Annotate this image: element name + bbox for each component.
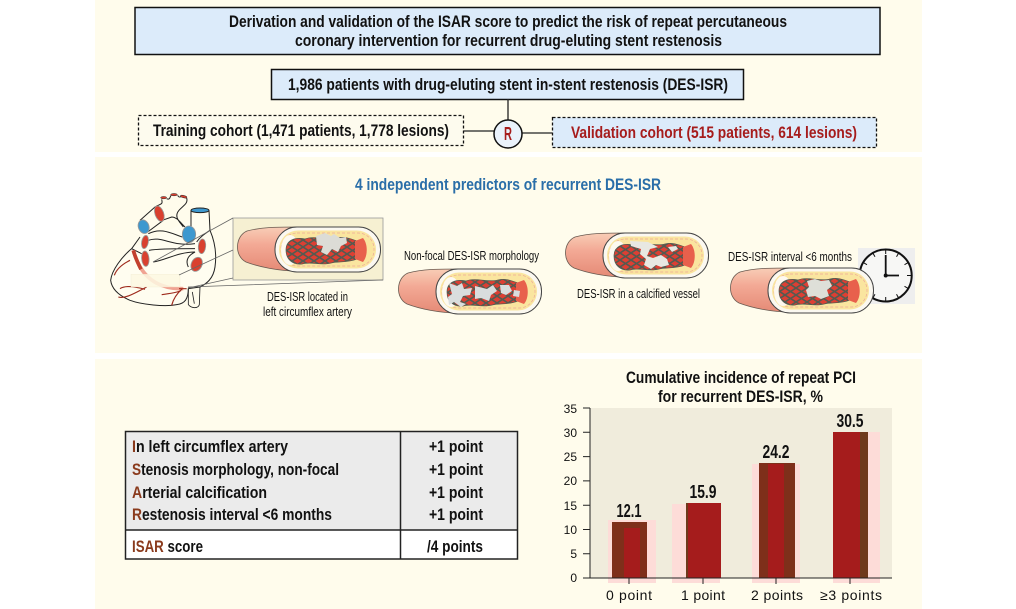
vessel: non-focal [398, 269, 542, 314]
ISAR score table: ISAR score [132, 537, 203, 556]
ISAR score table: +1 point [429, 437, 483, 456]
axes: 35 [564, 402, 577, 416]
zoom guide lines [153, 218, 383, 288]
bar: 3 points or more [833, 411, 880, 583]
axes [564, 402, 892, 603]
title box: coronary intervention for recurrent drug-eluting stent restenosis [295, 31, 722, 50]
bar chart [564, 402, 892, 603]
axes: 1 point [681, 587, 725, 603]
vessel: interval [730, 268, 874, 313]
chart title: for recurrent DES-ISR, % [658, 387, 823, 406]
chart title [626, 368, 856, 406]
axes: 0 point [606, 587, 652, 603]
ISAR score table: In left circumflex artery [132, 437, 288, 456]
bar: 1 point: 15.9 [690, 482, 716, 502]
axes: 0 [570, 571, 577, 585]
zoom box: circumflex vessel [233, 218, 383, 280]
panel: ISAR score and outcomes [95, 359, 922, 609]
randomisation connector: R [504, 124, 512, 144]
predictors heading: 4 independent predictors of recurrent DES-ISR [355, 175, 661, 194]
icon: clock [858, 248, 915, 304]
validation cohort box [552, 118, 876, 148]
axes: 2 points [751, 587, 803, 603]
bar: 1 point [672, 482, 721, 583]
ISAR score table [126, 432, 518, 559]
bar: 0 point: 12.1 [616, 501, 642, 521]
ISAR score table: /4 points [427, 537, 483, 556]
validation cohort box: Validation cohort (515 patients, 614 lesions) [571, 123, 857, 142]
label: circumflex: left circumflex artery [263, 304, 352, 319]
chart title: Cumulative incidence of repeat PCI [626, 368, 856, 387]
ISAR score table: +1 point [429, 483, 483, 502]
ISAR score table: Restenosis interval <6 months [132, 505, 332, 524]
axes: 10 [564, 523, 577, 537]
vessel: calcified [565, 233, 708, 278]
axes: 30 [564, 426, 577, 440]
bar: 2 points: 24.2 [762, 442, 790, 462]
patient population box [272, 70, 744, 100]
bar: 0 point [608, 501, 656, 583]
vessel: circumflex plaque [316, 233, 347, 255]
label: interval: DES-ISR interval <6 months [728, 249, 852, 264]
label: circumflex [263, 289, 352, 319]
axes: 5 [570, 547, 577, 561]
training cohort box: Training cohort (1,471 patients, 1,778 lesions) [153, 121, 449, 140]
panel: predictors [95, 157, 922, 353]
label: circumflex: DES-ISR located in [267, 289, 348, 304]
label: calcified vessel: DES-ISR in a calcified vessel [577, 286, 700, 301]
icon: heart [111, 193, 216, 308]
ISAR score table: +1 point [429, 505, 483, 524]
ISAR score table: +1 point [429, 460, 483, 479]
randomisation connector [463, 99, 552, 148]
ISAR score table: Stenosis morphology, non-focal [132, 460, 339, 479]
bar: 2 points [752, 442, 800, 583]
ISAR score table: Arterial calcification [132, 483, 267, 502]
axes: 15 [564, 499, 577, 513]
label: non-focal morphology: Non-focal DES-ISR morphology [404, 248, 539, 263]
training cohort box [138, 116, 464, 146]
bar: 3 points or more: 30.5 [836, 411, 864, 431]
panel: study design [95, 0, 922, 152]
axes: 25 [564, 450, 577, 464]
title box: Derivation and validation of the ISAR score to predict the risk of repeat percutaneous [229, 12, 787, 31]
axes: ≥3 points [820, 587, 882, 603]
title box [135, 8, 880, 54]
axes: 20 [564, 474, 577, 488]
patient population box: 1,986 patients with drug-eluting stent in-stent restenosis (DES-ISR) [288, 75, 728, 94]
